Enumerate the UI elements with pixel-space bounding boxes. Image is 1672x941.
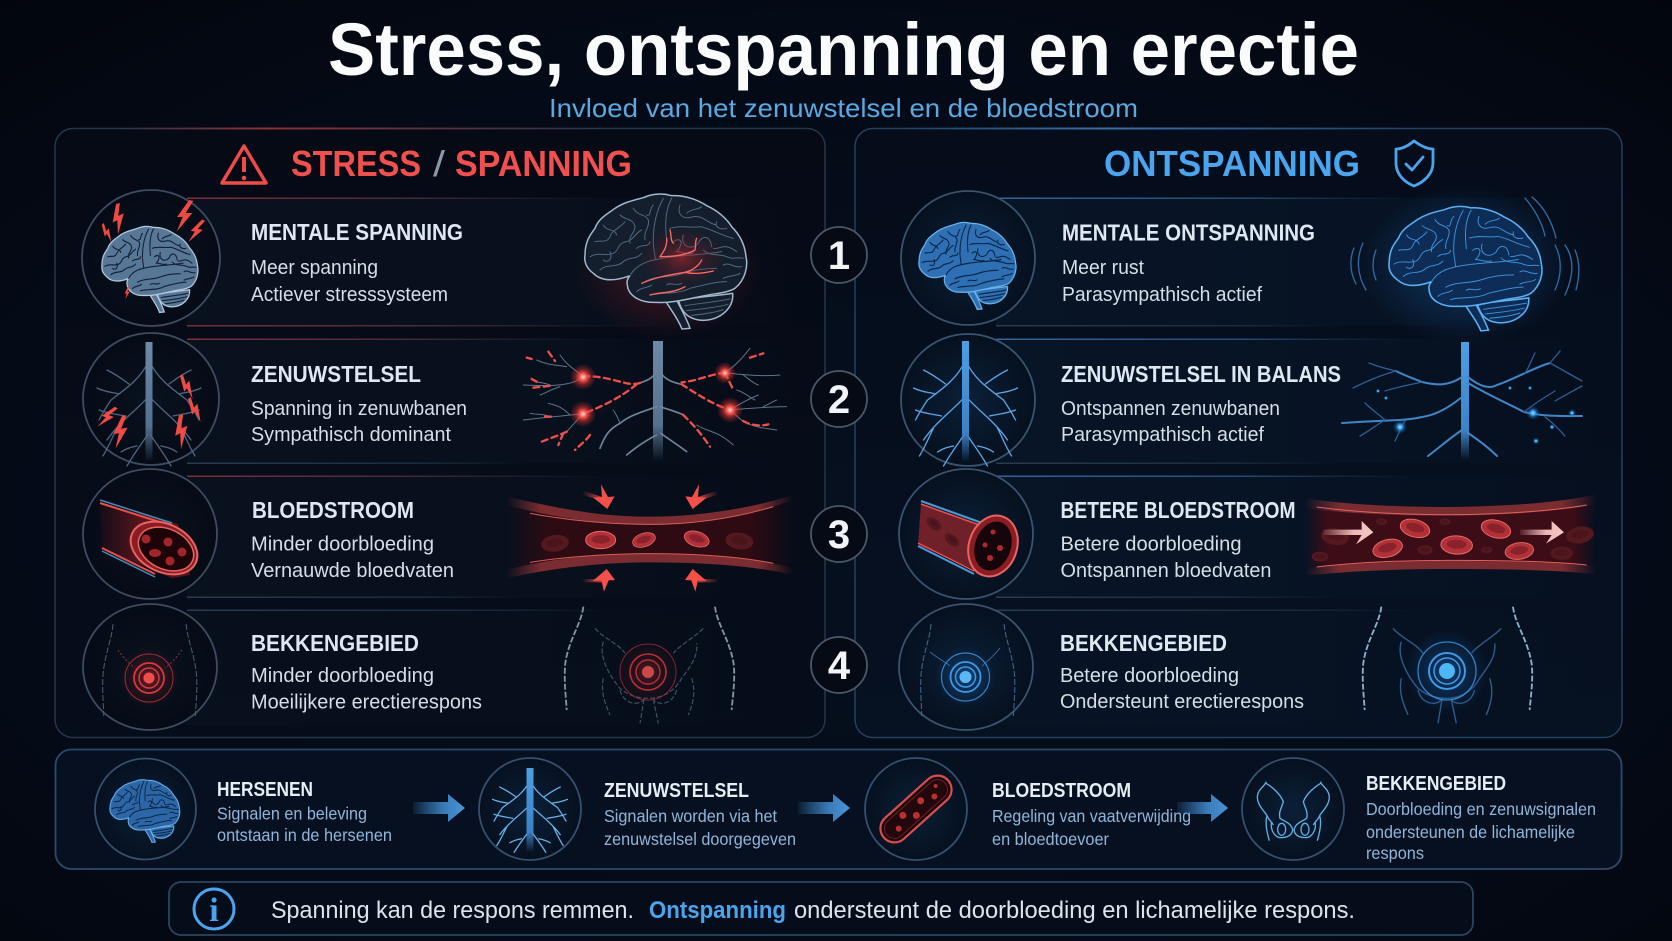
text: bekkengebied ontspannen: Betere doorbloeding [1060, 665, 1239, 687]
illustration: narrowed vessel with arrows [507, 484, 793, 592]
arrow 3 [1177, 794, 1228, 822]
text: zenuwstelsel in balans: Ontspannen zenuwbanen [1061, 398, 1280, 420]
text: mentale ontspanning: MENTALE ONTSPANNING [1062, 220, 1315, 246]
number badge 2: 2 [828, 378, 850, 422]
step: hersenen: ontstaan in de hersenen [217, 825, 392, 845]
panel: ontspanning [855, 128, 1622, 738]
text: betere bloedstroom: Betere doorbloeding [1060, 534, 1242, 556]
text: zenuwstelsel [251, 361, 467, 446]
icon: pelvis blue target [899, 604, 1033, 730]
step: bloedstroom: Regeling van vaatverwijding [992, 806, 1191, 826]
arrow 1 [413, 794, 465, 822]
step: bloedstroom [865, 758, 1191, 860]
number badge 4: 4 [828, 644, 851, 688]
heading: stress spanning: STRESS [291, 143, 421, 184]
step: zenuwstelsel: Signalen worden via het [604, 806, 777, 826]
icon: calm brain [901, 191, 1035, 325]
icon: nerves with lightning [83, 333, 219, 466]
number badge 1 [811, 227, 867, 283]
icon: pelvis target [83, 604, 217, 730]
text: bekkengebied ontspannen: BEKKENGEBIED [1060, 630, 1227, 656]
row: bloedstroom [83, 469, 797, 599]
row: bekkengebied ontspannen [899, 604, 1596, 730]
icon: shield with check [1396, 141, 1433, 186]
text: mentale spanning: Actiever stresssysteem [251, 284, 448, 306]
icon: vessel capsule [865, 758, 967, 860]
text: bekkengebied ontspannen [1060, 630, 1304, 713]
icon: pelvic bones [1242, 758, 1344, 860]
row: mentale ontspanning [901, 185, 1596, 345]
row: zenuwstelsel in balans [901, 334, 1596, 466]
illustration: pelvis with red target [565, 607, 734, 723]
callout: key message [169, 882, 1473, 935]
arrow 2 [798, 794, 850, 822]
text: mentale ontspanning: Meer rust [1062, 257, 1144, 279]
text: bekkengebied ontspannen: Ondersteunt erectierespons [1060, 691, 1304, 713]
icon: calm nerves [901, 334, 1035, 466]
icon: warning triangle [222, 146, 266, 183]
icon: info [194, 889, 234, 929]
illustration: glowing blue brain with waves [1351, 185, 1579, 345]
text: betere bloedstroom [1060, 497, 1296, 582]
text: bloedstroom: Minder doorbloeding [251, 534, 434, 556]
step: bekkengebied: BEKKENGEBIED [1366, 773, 1506, 795]
text: zenuwstelsel: ZENUWSTELSEL [251, 361, 421, 387]
row: betere bloedstroom [899, 469, 1597, 599]
title: Stress, ontspanning en erectie [328, 8, 1359, 91]
step: hersenen: Signalen en beleving [217, 804, 367, 824]
icon: blood vessel [83, 469, 217, 599]
step: hersenen: HERSENEN [217, 779, 313, 801]
text: zenuwstelsel in balans [1061, 361, 1341, 446]
step: bekkengebied: Doorbloeding en zenuwsignalen [1366, 799, 1596, 819]
step: bloedstroom: en bloedtoevoer [992, 829, 1109, 849]
text: mentale ontspanning: Parasympathisch actief [1062, 284, 1262, 306]
panel: pathway from brain to pelvis [56, 750, 1622, 869]
text: bloedstroom [251, 497, 454, 582]
text: zenuwstelsel in balans: Parasympathisch actief [1061, 424, 1264, 446]
text: bloedstroom: BLOEDSTROOM [252, 497, 414, 523]
step: hersenen [95, 758, 392, 860]
illustration: balanced nerve tree [1342, 342, 1582, 460]
text: bloedstroom: Vernauwde bloedvaten [251, 560, 454, 582]
number badge 3: 3 [828, 513, 850, 557]
text: bekkengebied [251, 630, 482, 714]
text: bekkengebied: Moeilijkere erectierespons [251, 692, 482, 714]
step: bekkengebied: ondersteunen de lichamelijke [1366, 822, 1575, 842]
callout: key message: Ontspanning [649, 897, 786, 924]
heading: stress spanning [222, 143, 632, 184]
subtitle: Invloed van het zenuwstelsel en de bloedstroom [549, 93, 1138, 123]
illustration: wide vessel with flow arrows [1305, 494, 1597, 576]
heading: ontspanning: ONTSPANNING [1104, 143, 1360, 184]
step: zenuwstelsel: ZENUWSTELSEL [604, 780, 749, 802]
heading: stress spanning: SPANNING [455, 143, 632, 184]
step: zenuwstelsel: zenuwstelsel doorgegeven [604, 829, 796, 849]
number badge 3 [811, 506, 867, 562]
text: mentale ontspanning [1062, 220, 1315, 306]
text: zenuwstelsel: Spanning in zenuwbanen [251, 398, 467, 420]
icon: stressed brain [82, 190, 220, 326]
icon: info: i [209, 892, 219, 929]
step: zenuwstelsel [479, 758, 796, 860]
icon: nerve tree [479, 758, 581, 860]
text: betere bloedstroom: Ontspannen bloedvaten [1060, 560, 1272, 582]
step: bekkengebied: respons [1366, 843, 1424, 863]
text: mentale spanning [251, 219, 463, 306]
text: bekkengebied: Minder doorbloeding [251, 665, 434, 687]
icon: open blood vessel [899, 469, 1033, 599]
illustration: pelvis with blue target [1363, 607, 1532, 723]
step: bekkengebied [1242, 758, 1596, 863]
row: zenuwstelsel [83, 333, 797, 466]
text: mentale spanning: MENTALE SPANNING [251, 219, 463, 245]
row: mentale spanning [82, 190, 797, 340]
text: mentale spanning: Meer spanning [251, 257, 378, 279]
row: bekkengebied [83, 604, 797, 730]
illustration: sympathetic nerve tree [523, 341, 787, 461]
number badge 4 [811, 637, 867, 693]
text: bekkengebied: BEKKENGEBIED [251, 630, 419, 656]
text: zenuwstelsel in balans: ZENUWSTELSEL IN BALANS [1061, 361, 1341, 387]
text: zenuwstelsel: Sympathisch dominant [251, 424, 451, 446]
callout: key message: ondersteunt de doorbloeding en lichamelijke respons. [794, 897, 1355, 924]
icon: brain [95, 758, 196, 860]
number badge 2 [811, 371, 867, 427]
step: bloedstroom: BLOEDSTROOM [992, 780, 1131, 802]
number badge 1: 1 [828, 234, 850, 278]
illustration: brain with red activity [573, 194, 763, 340]
callout: key message: Spanning kan de respons remmen. [271, 897, 634, 924]
text: betere bloedstroom: BETERE BLOEDSTROOM [1060, 497, 1296, 523]
heading: stress spanning: / [433, 143, 445, 184]
panel: stress / spanning [55, 128, 825, 738]
